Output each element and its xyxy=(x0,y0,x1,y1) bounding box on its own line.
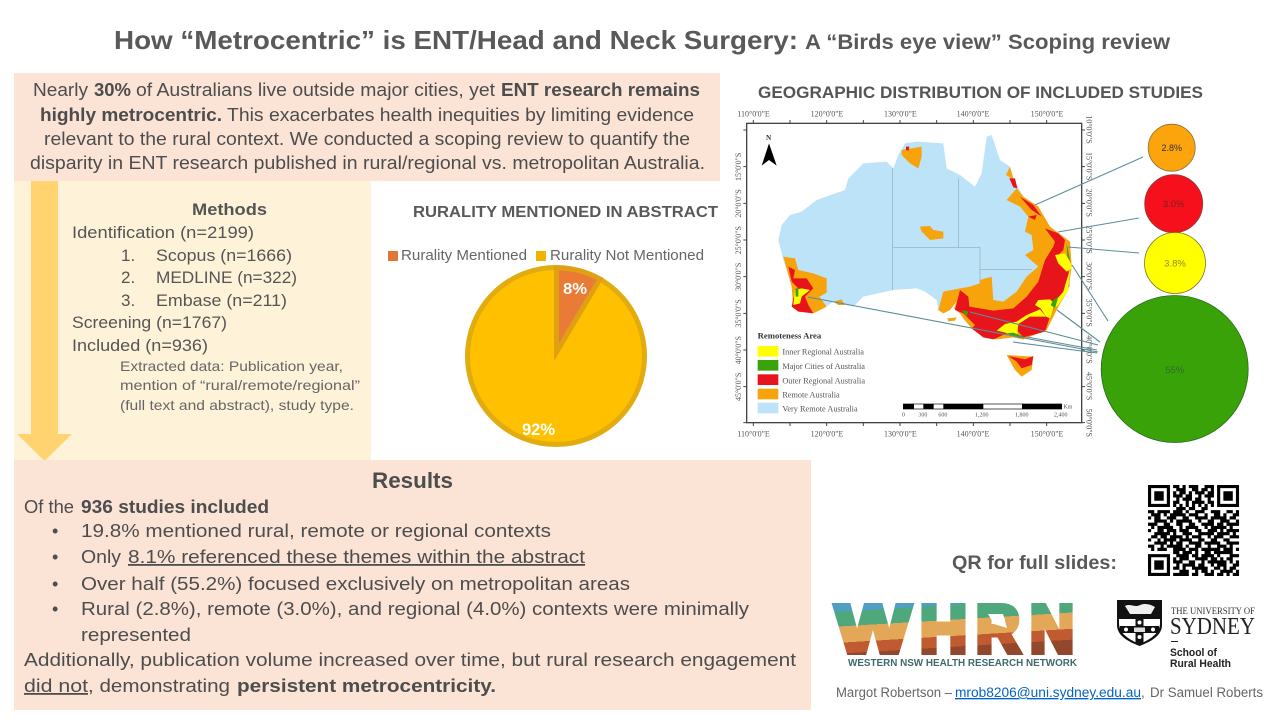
map of Australia by remoteness: 25°0'0"S xyxy=(734,226,743,254)
panel: introduction: ENT research remains xyxy=(501,80,700,100)
authors footer: , xyxy=(1141,685,1145,700)
text block: methods: MEDLINE (n=322) xyxy=(156,268,297,287)
results text: Only xyxy=(81,547,121,567)
circle: outer regional 3.0%: 3.0% xyxy=(1163,199,1185,210)
panel: introduction: This exacerbates health inequities by limiting evidence xyxy=(227,105,694,125)
map of Australia by remoteness: 130°0'0"E xyxy=(884,430,917,439)
results text: • xyxy=(52,599,58,619)
text block: methods: Screening (n=1767) xyxy=(72,313,227,332)
map of Australia by remoteness: 45°0'0"S xyxy=(734,373,743,401)
logo: WHRN: R xyxy=(976,592,1020,667)
map of Australia by remoteness: 150°0'0"E xyxy=(1031,430,1064,439)
panel: methods xyxy=(14,181,371,461)
panel: introduction: disparity in ENT research published in rural/regional vs. metropolitan Australia. xyxy=(30,153,705,173)
icon: crest shield xyxy=(1117,600,1162,646)
circle: inner regional 3.8%: 3.8% xyxy=(1164,258,1186,270)
legend xyxy=(388,248,704,264)
circle: inner regional 3.8% xyxy=(1144,232,1206,294)
text block: methods: Identification (n=2199) xyxy=(72,223,254,242)
results text: Additionally, publication volume increased over time, but rural research engagement xyxy=(24,650,796,670)
logo: WHRN xyxy=(836,592,1078,669)
very remote Australia base xyxy=(778,135,1072,339)
pie: 92% slice: 92% xyxy=(522,421,555,439)
results text: persistent metrocentricity. xyxy=(237,676,496,696)
logo: University of Sydney: Rural Health xyxy=(1170,658,1231,670)
text block: methods: (full text and abstract), study type. xyxy=(120,397,354,413)
results text: Of the xyxy=(24,497,74,517)
authors footer: mrob8206@uni.sydney.edu.au xyxy=(955,685,1141,700)
map of Australia by remoteness: 25°0'0"S xyxy=(1085,225,1094,254)
results text: 936 studies included xyxy=(81,497,269,517)
QR label: QR for full slides: xyxy=(952,553,1117,574)
map of Australia by remoteness: 15°0'0"S xyxy=(734,153,743,181)
map of Australia by remoteness: 50°0'0"S xyxy=(1085,409,1094,437)
text block: methods: 2. xyxy=(121,268,135,287)
pie: 8% slice: 8% xyxy=(563,281,587,298)
map of Australia by remoteness: 35°0'0"S xyxy=(734,299,743,328)
map of Australia by remoteness: 20°0'0"S xyxy=(734,189,743,218)
circle: major cities 55% xyxy=(1101,296,1248,442)
circle: remote 2.8%: 2.8% xyxy=(1161,143,1182,153)
legend: remoteness area: Very Remote Australia xyxy=(782,404,858,413)
pie: 92% slice xyxy=(468,268,644,444)
major cities regions xyxy=(795,243,1072,338)
circle: remote 2.8% xyxy=(1148,124,1195,171)
authors footer: Dr Samuel Roberts xyxy=(1150,685,1263,700)
map of Australia by remoteness: 30°0'0"S xyxy=(1085,262,1094,290)
heading: geographic distribution: GEOGRAPHIC DISTRIBUTION OF INCLUDED STUDIES xyxy=(758,83,1203,102)
circle: major cities 55%: 55% xyxy=(1165,365,1185,376)
scale bar: 2,400 xyxy=(1054,413,1067,419)
results text: • xyxy=(52,521,58,541)
map of Australia by remoteness: 140°0'0"E xyxy=(957,109,990,118)
legend: remoteness area: Outer Regional Australia xyxy=(782,376,865,385)
logo: WHRN: W xyxy=(836,592,911,667)
map of Australia by remoteness: 45°0'0"S xyxy=(1085,372,1094,400)
circle: outer regional 3.0% xyxy=(1145,175,1203,233)
map of Australia by remoteness: 130°0'0"E xyxy=(884,109,917,118)
panel: introduction: 30% xyxy=(94,80,131,100)
text block: methods: Methods xyxy=(192,200,267,219)
results text: • xyxy=(52,574,58,594)
results text: represented xyxy=(81,625,191,645)
panel: results xyxy=(14,460,811,710)
logo: WHRN: N xyxy=(1030,592,1074,667)
map of Australia by remoteness: 30°0'0"S xyxy=(734,263,743,291)
legend: Rurality Not Mentioned xyxy=(550,248,704,264)
panel: introduction: relevant to the rural context. We conducted a scoping review to quantify the xyxy=(44,129,690,149)
scale bar: 600 xyxy=(938,413,947,419)
panel: introduction xyxy=(14,73,720,181)
map of Australia by remoteness: 110°0'0"E xyxy=(737,430,770,439)
logo: University of Sydney: School of xyxy=(1170,647,1217,659)
results text: 19.8% mentioned rural, remote or regional contexts xyxy=(81,521,551,541)
title: A “Birds eye view” Scoping review xyxy=(805,31,1171,54)
inner regional Australia regions xyxy=(793,253,1072,334)
title: How “Metrocentric” is ENT/Head and Neck Surgery: xyxy=(114,25,798,55)
logo: University of Sydney: SYDNEY xyxy=(1170,614,1255,640)
icon: QR code xyxy=(1148,485,1239,576)
map of Australia by remoteness: 15°0'0"S xyxy=(1085,152,1094,180)
scale bar: 300 xyxy=(918,413,927,419)
map of Australia by remoteness xyxy=(734,109,1094,439)
north arrow xyxy=(762,133,777,166)
map of Australia by remoteness: 40°0'0"S xyxy=(1085,335,1094,364)
text block: methods: Scopus (n=1666) xyxy=(156,246,292,265)
text block: methods: mention of “rural/remote/regional” xyxy=(120,377,360,393)
scale bar: Km xyxy=(1063,405,1073,411)
legend: remoteness area: Remote Australia xyxy=(782,390,840,399)
arrow: methods flow xyxy=(17,181,72,461)
remote Australia regions xyxy=(783,147,1072,377)
authors footer: Margot Robertson – xyxy=(836,685,952,700)
logo: WHRN: H xyxy=(920,592,967,667)
text block: methods: 1. xyxy=(121,246,135,265)
results text: did not xyxy=(24,676,88,696)
logo: University of Sydney: THE UNIVERSITY OF xyxy=(1171,607,1255,617)
logo: University of Sydney xyxy=(1117,600,1255,670)
scale bar: 0 xyxy=(902,413,905,419)
results text: Over half (55.2%) focused exclusively on metropolitan areas xyxy=(81,574,630,594)
heading: results: Results xyxy=(372,468,453,493)
legend: Rurality Mentioned xyxy=(401,248,527,264)
outer regional Australia regions xyxy=(788,147,1069,368)
map of Australia by remoteness: 35°0'0"S xyxy=(1085,299,1094,327)
map of Australia by remoteness: 120°0'0"E xyxy=(811,109,844,118)
legend: remoteness area: Inner Regional Australia xyxy=(782,348,864,357)
pie: 8% slice xyxy=(556,268,600,352)
map of Australia by remoteness: 40°0'0"S xyxy=(734,336,743,364)
text block: methods: 3. xyxy=(121,291,135,310)
leader lines from map to circles xyxy=(808,157,1143,353)
panel: introduction: highly metrocentric. xyxy=(40,105,222,125)
map of Australia by remoteness: 150°0'0"E xyxy=(1031,109,1064,118)
north arrow: N xyxy=(766,133,772,142)
map of Australia by remoteness: 110°0'0"E xyxy=(737,109,770,118)
logo: WHRN: WESTERN NSW HEALTH RESEARCH NETWORK xyxy=(848,658,1078,669)
map of Australia by remoteness: 120°0'0"E xyxy=(811,430,844,439)
map of Australia by remoteness: 10°0'0"S xyxy=(1085,115,1094,144)
panel: introduction: Nearly xyxy=(33,80,88,100)
panel: introduction: of Australians live outside major cities, yet xyxy=(136,80,495,100)
results text xyxy=(24,497,796,696)
results text: • xyxy=(52,547,58,567)
text block: methods: Included (n=936) xyxy=(72,336,208,355)
text block: methods xyxy=(72,200,360,413)
scale bar xyxy=(902,404,1073,419)
pie chart: rurality mentioned in abstract xyxy=(388,204,718,444)
scale bar: 1,200 xyxy=(975,413,988,419)
authors footer xyxy=(836,685,1263,700)
text block: methods: Embase (n=211) xyxy=(156,291,287,310)
legend: remoteness area xyxy=(758,330,865,413)
legend: remoteness area: Remoteness Area xyxy=(758,330,822,340)
results text: , demonstrating xyxy=(88,676,230,696)
title xyxy=(114,25,1171,55)
text block: methods: Extracted data: Publication year, xyxy=(120,358,343,374)
map of Australia by remoteness: 140°0'0"E xyxy=(957,430,990,439)
legend: remoteness area: Major Cities of Australia xyxy=(782,362,865,371)
results text: Rural (2.8%), remote (3.0%), and regional (4.0%) contexts were minimally xyxy=(81,599,749,619)
chart title: RURALITY MENTIONED IN ABSTRACT xyxy=(413,204,718,221)
scale bar: 1,800 xyxy=(1015,413,1028,419)
map of Australia by remoteness: 20°0'0"S xyxy=(1085,189,1094,217)
results text: 8.1% referenced these themes within the abstract xyxy=(128,547,585,567)
